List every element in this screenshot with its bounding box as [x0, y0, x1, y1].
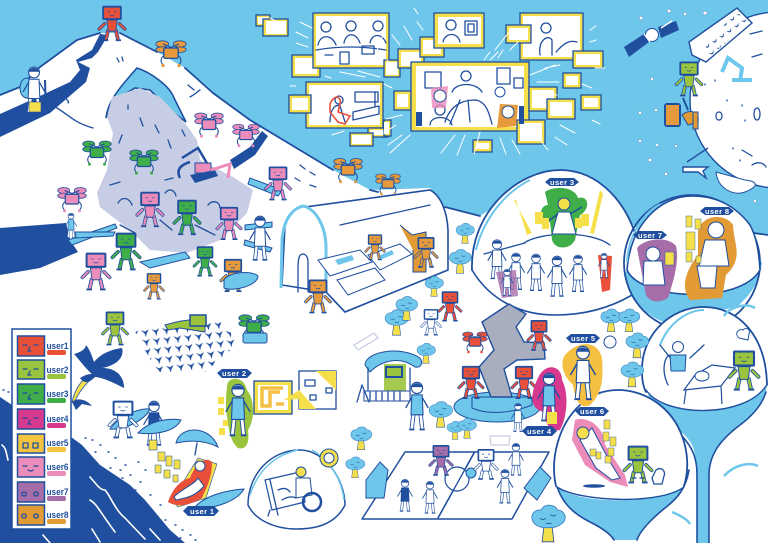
legend user 8: [18, 505, 68, 525]
kiosk: [357, 351, 422, 402]
user 5 thought bubble: [604, 336, 616, 348]
orange robot on the moon: [664, 98, 698, 129]
palm tree: [72, 345, 124, 410]
legend user 4: user4: [46, 414, 68, 424]
chef robot: [730, 350, 758, 390]
goal nets: [524, 467, 551, 500]
robots at the sculpture: [528, 320, 550, 350]
label user 1: [183, 506, 219, 516]
white bench near field: [490, 436, 510, 445]
yellow stage cards: [535, 212, 589, 229]
sports field: [362, 443, 551, 519]
sand dots: [3, 390, 196, 540]
easel painting: [265, 472, 305, 510]
white fan on red: [598, 253, 610, 278]
legend faces: [22, 345, 38, 518]
video call screens: [256, 13, 603, 152]
purple highlighted fan: [496, 270, 518, 298]
legend user 2: [18, 360, 68, 379]
user 3 star with green halo: [541, 188, 587, 248]
legend user 4: [18, 409, 68, 429]
snow cap on landslide: [106, 68, 186, 122]
label user 3: user 3: [550, 178, 574, 187]
label user 5: user 5: [571, 334, 596, 343]
label user 1: user 1: [190, 507, 214, 516]
legend user 5: user5: [46, 438, 68, 448]
chef hat: [737, 328, 749, 340]
legend user 7: user7: [46, 487, 68, 497]
mountain ridge outline: [0, 33, 768, 235]
river lower left: [0, 223, 78, 275]
side bubble fragments: [672, 306, 758, 524]
bubble user 8 and user 7: [624, 195, 762, 331]
wheelchair painter dome: [248, 449, 345, 529]
highlighted people on main screen: [416, 86, 524, 128]
dome user 3 concert: [472, 170, 640, 315]
lime screen: [190, 315, 206, 326]
label user 8: user 8: [705, 207, 730, 216]
user 7 figure: [637, 239, 677, 301]
legend user 3: [18, 384, 68, 404]
pink excavator robot: [178, 148, 230, 183]
man with hat at kiosk: [406, 382, 428, 430]
blue patients: [335, 250, 394, 265]
user 2 flow chart: [254, 371, 336, 414]
legend user 6: [18, 457, 68, 477]
moon bump: [716, 172, 755, 193]
slope snow ticks: [52, 57, 316, 187]
drones over the mountain: [156, 41, 186, 67]
label user 4: user 4: [527, 427, 552, 436]
child rescued: [65, 213, 77, 238]
hospital tunnel building: [281, 190, 448, 312]
label user 6: user 6: [580, 407, 604, 416]
ball: [466, 468, 476, 478]
ocean waves: [2, 445, 160, 543]
river segment on the right slope: [230, 131, 268, 169]
legend user 5: [18, 434, 68, 453]
radiating lines: [270, 8, 605, 155]
user 8 figure: [685, 217, 737, 300]
moon base: [689, 8, 768, 193]
bubble with chef robot: [642, 307, 767, 543]
blue sculpture base: [454, 392, 540, 422]
moon craters: [705, 31, 766, 167]
legend user 2: user2: [46, 365, 68, 375]
dark shadow: [583, 484, 605, 488]
lime robot on the moon: [676, 61, 702, 96]
stars: [638, 9, 757, 203]
debris planks: [68, 178, 282, 268]
legend user 8: user8: [46, 510, 68, 520]
user labels: [183, 178, 734, 516]
legend user 3: user3: [46, 389, 68, 399]
ocean: [0, 397, 185, 543]
painter in wheelchair: [296, 467, 306, 477]
blue capsule vehicle: [224, 273, 258, 289]
label user 7: user 7: [638, 231, 662, 240]
waving user at the table: [660, 345, 704, 385]
yellow notes on the beach: [155, 452, 180, 482]
robotic grabber arm on the moon: [683, 148, 708, 178]
lying robot: [165, 319, 205, 332]
legend user 6: user6: [46, 462, 68, 472]
hospital beds: [318, 244, 412, 295]
blue moon crane: [722, 58, 752, 82]
surfers with boards: [109, 401, 181, 450]
user 2 figure with green halo: [218, 379, 253, 448]
legend user 7: [18, 482, 68, 502]
label user 2: user 2: [222, 369, 246, 378]
surfboard: [194, 489, 244, 508]
label user 4: [522, 426, 557, 436]
robot user 1 on summit: [99, 6, 125, 40]
yellow sticky notes: [686, 216, 701, 263]
flock of seedlings: [133, 322, 237, 372]
white robot resting: [421, 309, 441, 335]
grey sculpture: [479, 304, 545, 397]
red highlighted fan: [598, 255, 612, 292]
user 1 on beach chair: [168, 458, 217, 507]
white park bench: [354, 333, 378, 350]
bubble user 6: [554, 390, 689, 540]
beach parasol: [176, 430, 218, 455]
landslide scratches: [110, 105, 220, 235]
stage: [484, 234, 610, 254]
trees: [385, 310, 408, 335]
child running: [511, 403, 525, 431]
yellow notes around user 6: [590, 420, 616, 463]
legend panel: [12, 329, 71, 529]
yellow avatar bubble: [320, 449, 338, 467]
pet and toys: [632, 469, 665, 484]
pink reclining figure: [572, 419, 628, 487]
table with food: [684, 365, 735, 404]
satellite: [624, 21, 679, 57]
players: [430, 445, 452, 475]
orange robots at the hospital: [306, 279, 330, 313]
green drone with carrier: [239, 315, 269, 343]
hiker: [20, 67, 46, 113]
audience: [488, 240, 506, 278]
stage spotlights: [514, 190, 603, 235]
rescue worker: [250, 216, 270, 260]
lime robot on the field edge: [103, 311, 127, 345]
people on screens: [316, 20, 577, 125]
user 4 magenta figure: [532, 367, 566, 430]
solar panel building: [689, 8, 752, 62]
landslide rock: [97, 88, 253, 253]
legend user 1: user1: [46, 341, 68, 351]
legend user 1: [18, 336, 68, 356]
red outlined player at the screen: [330, 97, 350, 124]
river on the upper slope: [0, 34, 108, 137]
lime companion robot: [624, 446, 652, 482]
orange arm robot: [400, 225, 426, 272]
user 5 yellow figure: [562, 344, 602, 406]
robots clearing debris: [266, 166, 290, 200]
